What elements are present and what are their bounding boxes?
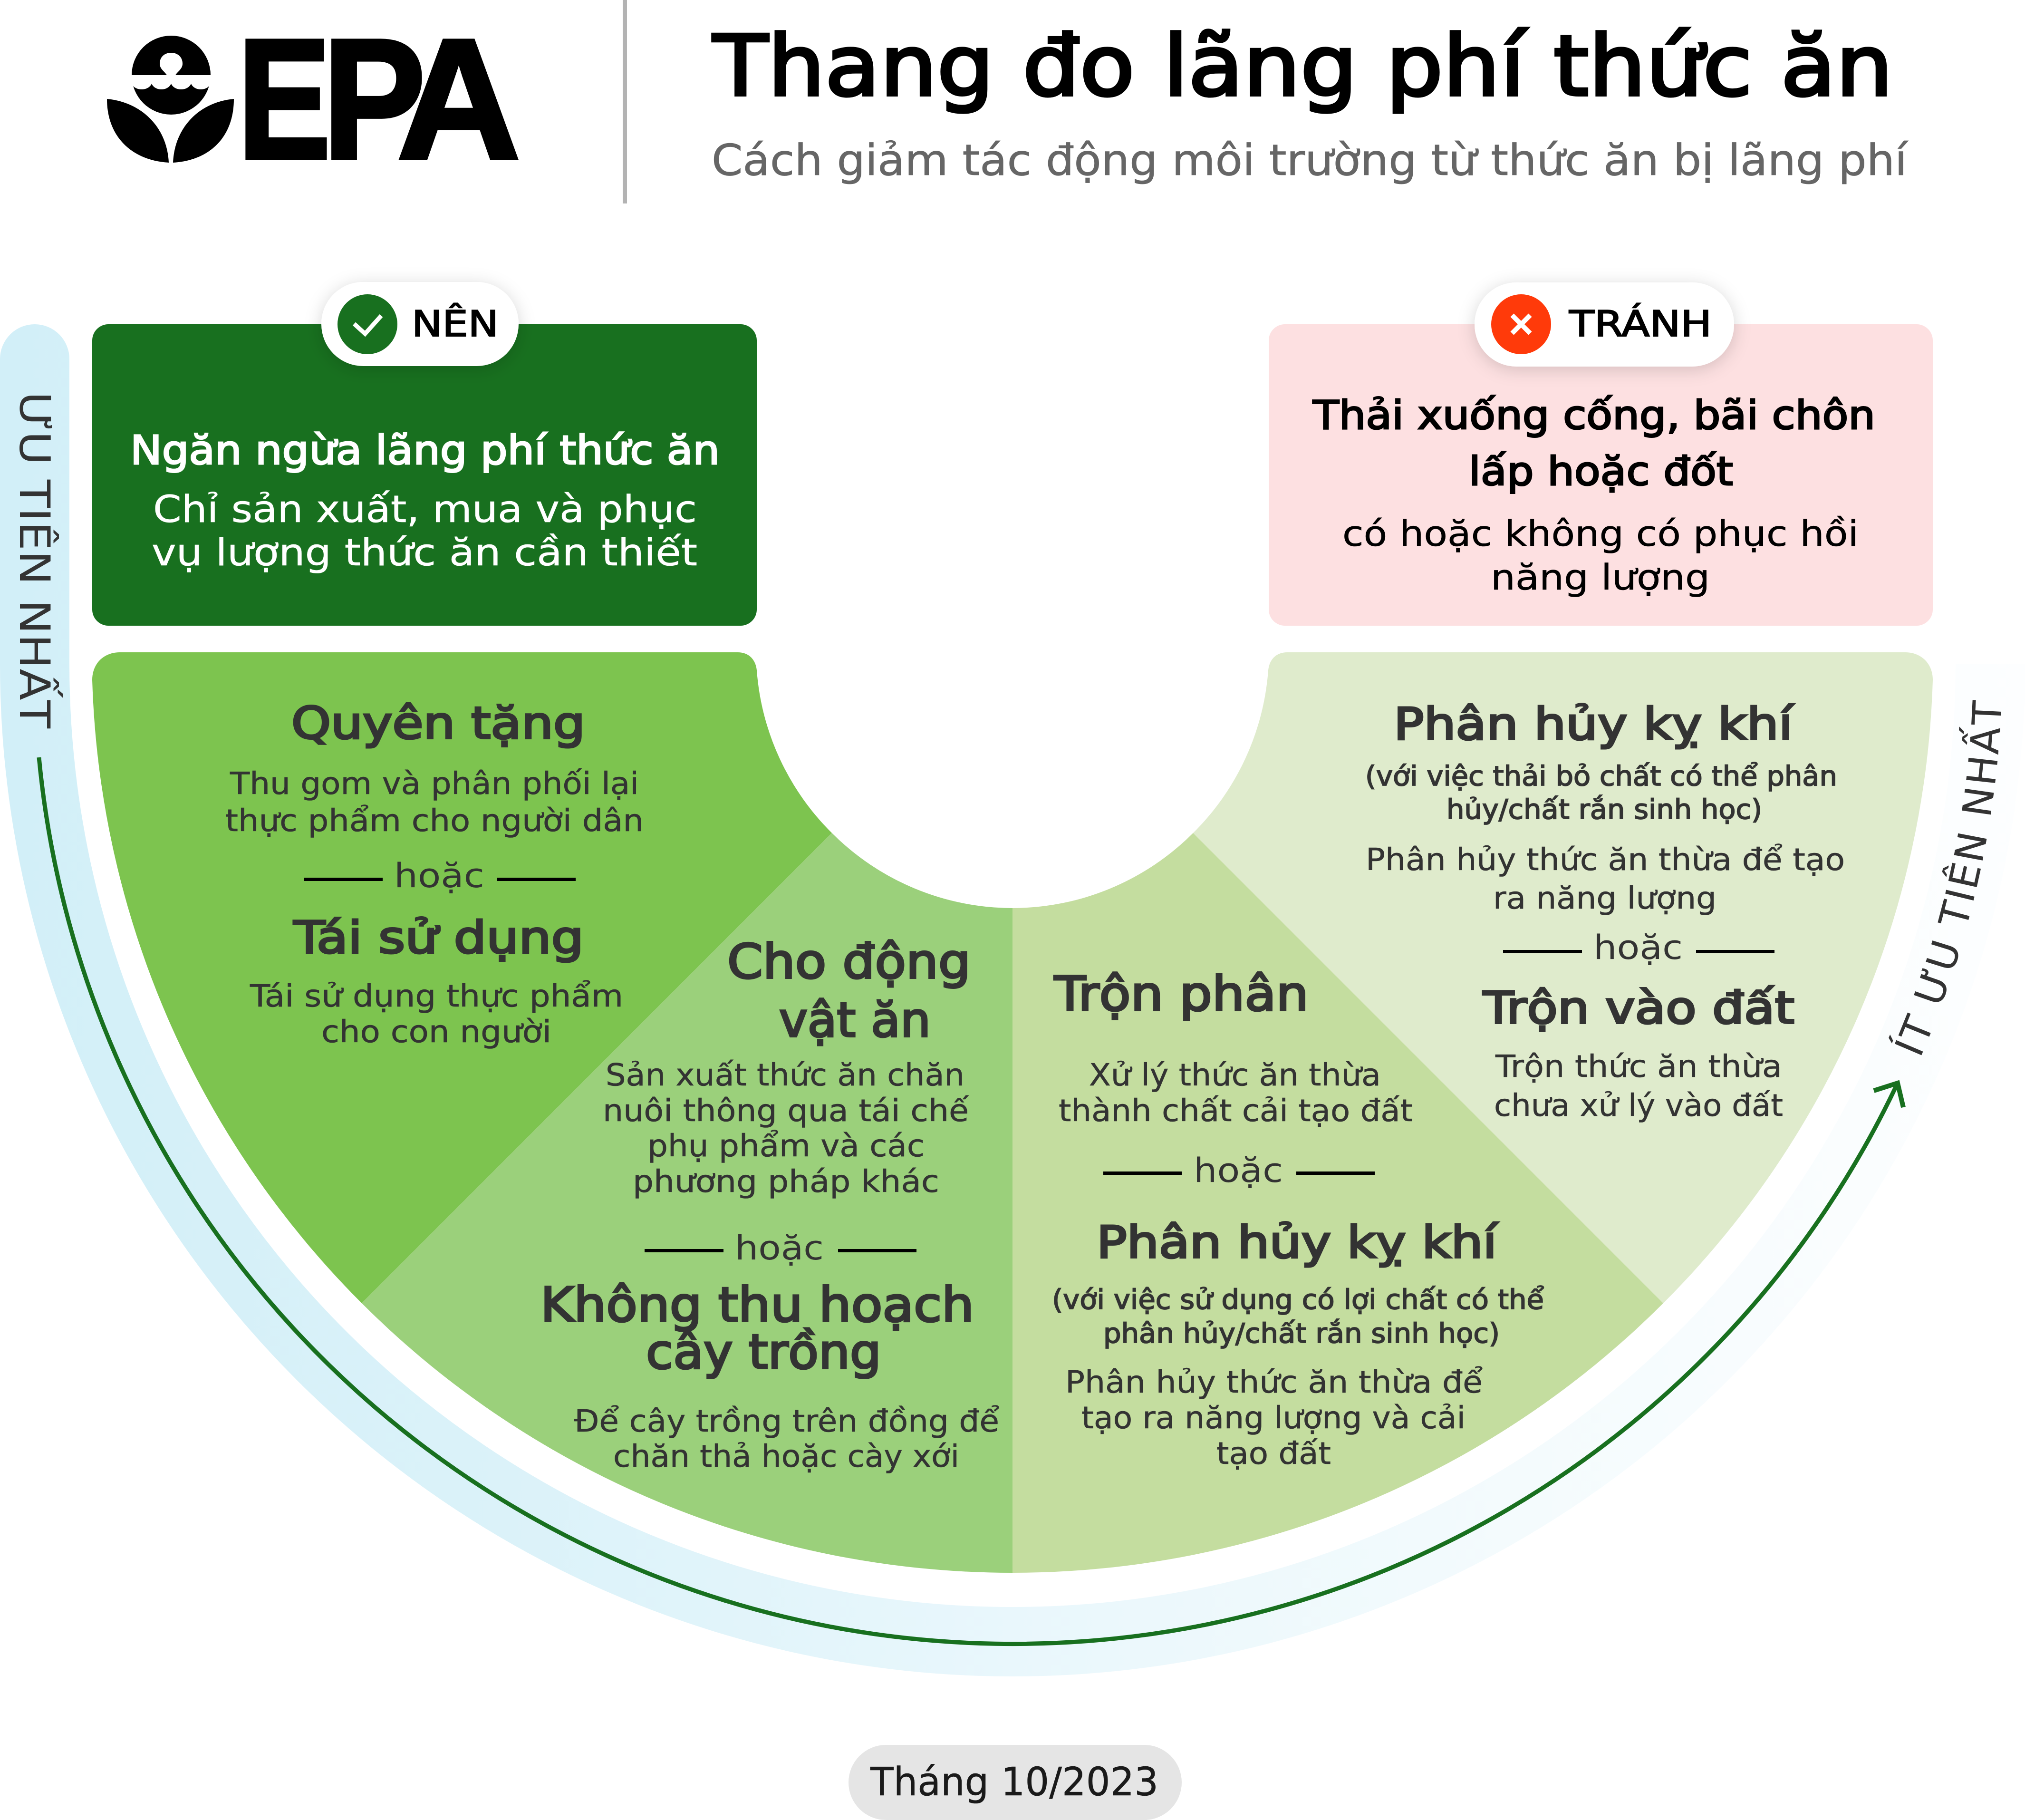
- description: Thu gom và phân phối lại: [230, 766, 639, 802]
- icon: cross: [1491, 294, 1551, 354]
- description: nuôi thông qua tái chế: [603, 1094, 969, 1129]
- heading: Phân hủy kỵ khí: [1097, 1217, 1499, 1268]
- description: tạo đất: [1216, 1436, 1331, 1471]
- description: [1065, 1365, 1483, 1471]
- label: lowest priority: ÍT ƯU TIÊN NHẤT: [1886, 697, 2011, 1063]
- description: cho con người: [321, 1015, 551, 1050]
- priority band: [35, 359, 1990, 1642]
- panel: avoid box: [1269, 324, 1933, 626]
- panel: compost wedge: [1012, 833, 1663, 1573]
- heading: Ngăn ngừa lãng phí thức ăn: [130, 427, 720, 474]
- description: phụ phẩm và các: [647, 1129, 925, 1164]
- badge text: NÊN: [412, 303, 499, 345]
- description: [603, 1058, 969, 1200]
- description: chăn thả hoặc cày xới: [613, 1439, 959, 1474]
- date pill: Tháng 10/2023: [870, 1760, 1158, 1805]
- divider: [623, 0, 627, 203]
- description: Xử lý thức ăn thừa: [1089, 1058, 1381, 1093]
- or separator: hoặc: [735, 1229, 824, 1268]
- description: chưa xử lý vào đất: [1494, 1088, 1783, 1123]
- qualifier: [1052, 1284, 1544, 1349]
- or separator: hoặc: [1593, 928, 1683, 967]
- or separator: [304, 856, 576, 895]
- heading: Phân hủy kỵ khí: [1394, 698, 1794, 750]
- EPA wordmark: P: [323, 3, 425, 195]
- description: Trộn thức ăn thừa: [1495, 1049, 1782, 1084]
- heading: Không thu hoạch: [540, 1277, 974, 1333]
- EPA wordmark: [238, 3, 521, 195]
- description: [225, 766, 644, 839]
- heading: lấp hoặc đốt: [1469, 448, 1733, 494]
- heading: Trộn vào đất: [1483, 982, 1794, 1034]
- body text: năng lượng: [1491, 557, 1710, 598]
- EPA wordmark: E: [238, 3, 331, 195]
- heading: vật ăn: [779, 992, 931, 1048]
- qualifier: (với việc sử dụng có lợi chất có thể: [1052, 1284, 1544, 1316]
- body text: vụ lượng thức ăn cần thiết: [152, 532, 697, 574]
- or separator: hoặc: [1194, 1151, 1283, 1190]
- heading: [727, 934, 971, 1048]
- EPA wordmark: A: [397, 4, 521, 195]
- title: Thang đo lãng phí thức ăn: [713, 18, 1893, 115]
- description: ra năng lượng: [1493, 881, 1716, 916]
- description: thành chất cải tạo đất: [1059, 1094, 1413, 1129]
- description: Tái sử dụng thực phẩm: [250, 979, 623, 1014]
- label: highest priority: ƯU TIÊN NHẤT: [10, 392, 63, 729]
- icon: EPA flower emblem: [107, 36, 234, 163]
- badge text: TRÁNH: [1569, 303, 1712, 345]
- body text: [152, 488, 697, 574]
- description: [250, 979, 623, 1050]
- heading: [1312, 392, 1875, 494]
- description: [1366, 842, 1845, 916]
- heading: [540, 1277, 974, 1380]
- panel: do box: [92, 324, 757, 626]
- heading: Cho động: [727, 934, 971, 989]
- or separator: [1503, 928, 1774, 967]
- subtitle: Cách giảm tác động môi trường từ thức ăn bị lãng phí: [712, 136, 1909, 185]
- badge: NÊN: [321, 282, 519, 366]
- qualifier: hủy/chất rắn sinh học): [1446, 794, 1762, 825]
- body text: [1342, 513, 1859, 598]
- description: Phân hủy thức ăn thừa để: [1065, 1365, 1483, 1400]
- description: phương pháp khác: [633, 1164, 939, 1200]
- qualifier: phân hủy/chất rắn sinh học): [1103, 1318, 1500, 1349]
- description: [574, 1404, 999, 1474]
- heading: Thải xuống cống, bãi chôn: [1312, 392, 1875, 438]
- qualifier: [1365, 761, 1837, 825]
- heading: Tái sử dụng: [293, 912, 584, 963]
- description: tạo ra năng lượng và cải: [1081, 1401, 1466, 1436]
- heading: Quyên tặng: [291, 697, 585, 749]
- panel: donate and reuse wedge: [92, 652, 832, 1303]
- body text: có hoặc không có phục hồi: [1342, 513, 1859, 554]
- icon: check mark: [338, 294, 397, 354]
- or separator: [1103, 1151, 1375, 1190]
- description: Sản xuất thức ăn chăn: [606, 1058, 964, 1093]
- panel: feed animals wedge: [362, 833, 1012, 1573]
- date pill: [849, 1745, 1182, 1820]
- qualifier: (với việc thải bỏ chất có thể phân: [1365, 761, 1837, 792]
- description: [1059, 1058, 1413, 1129]
- heading: Trộn phân: [1054, 966, 1309, 1022]
- panel: anaerobic digestion and land application wedge: [1193, 652, 1933, 1303]
- header: EPA logo: [107, 3, 521, 195]
- or separator: hoặc: [394, 856, 484, 895]
- description: Phân hủy thức ăn thừa để tạo: [1366, 842, 1845, 878]
- heading: cây trồng: [646, 1324, 881, 1380]
- description: Để cây trồng trên đồng để: [574, 1404, 999, 1439]
- arrow: priority direction: [39, 757, 1903, 1644]
- body text: Chỉ sản xuất, mua và phục: [153, 488, 697, 531]
- description: thực phẩm cho người dân: [225, 804, 644, 839]
- or separator: [645, 1229, 916, 1268]
- badge: TRÁNH: [1475, 282, 1734, 367]
- description: [1494, 1049, 1783, 1123]
